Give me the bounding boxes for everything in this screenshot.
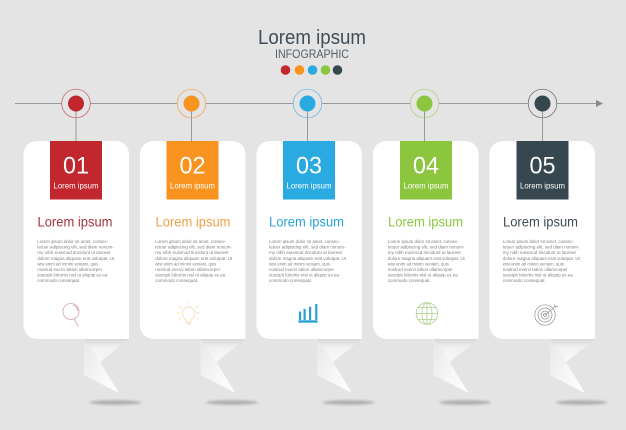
fold 3 [317,339,362,393]
icon: bar chart [298,304,318,323]
body text 4: tetuer adipiscing elit, sed diam nonum- [388,245,465,250]
shadow 5 [556,400,608,405]
body text 1: my nibh euismod tincidunt ut laoreet [37,250,111,255]
body text 2: tetuer adipiscing elit, sed diam nonum- [155,245,232,250]
badge 2 [166,141,218,200]
heading 5: Lorem ipsum [503,214,578,230]
body text 1: dolore magna aliquam erat volutpat. Ut [37,256,115,261]
body text 3: suscipit lobortis nisl ut aliquip ex ea [269,273,339,278]
body text 1: wisi enim ad minim veniam, quis [37,261,99,266]
body text 4: wisi enim ad minim veniam, quis [388,261,449,266]
body text 5: suscipit lobortis nisl ut aliquip ex ea [503,273,573,278]
badge 2: 02 [180,152,206,180]
step 4 [373,89,491,405]
body text 5 [503,239,580,283]
body text 5: commodo consequat. [503,278,546,283]
body text 1: tetuer adipiscing elit, sed diam nonum- [37,245,114,250]
body text 2: commodo consequat. [155,278,198,283]
badge 4 [400,141,452,200]
card 2 [140,141,246,339]
body text 3: dolore magna aliquam erat volutpat. Ut [269,256,347,261]
badge 3 [283,141,335,200]
badge 2: Lorem ipsum [170,182,215,190]
body text 5: Lorem ipsum dolor sit amet, consec- [503,239,574,244]
badge 4: Lorem ipsum [404,182,449,190]
node 4 [410,89,439,118]
body text 2: wisi enim ad minim veniam, quis [155,261,217,266]
body text 4: suscipit lobortis nisl ut aliquip ex ea [388,273,458,278]
body text 4: commodo consequat. [388,278,431,283]
body text 3: tetuer adipiscing elit, sed diam nonum- [269,245,346,250]
body text 4: nostrud exerci tation ullamcorper [388,267,453,272]
connector 3 [307,112,308,142]
body text 5: dolore magna aliquam erat volutpat. Ut [503,256,580,261]
body text 3: wisi enim ad minim veniam, quis [269,261,331,266]
body text 2: Lorem ipsum dolor sit amet, consec- [155,239,227,244]
icon: globe [416,303,438,324]
badge 4: 04 [413,152,439,180]
body text 5: my nibh euismod tincidunt ut laoreet [503,250,576,255]
badge 3: Lorem ipsum [286,182,332,190]
body text 5: nostrud exerci tation ullamcorper [503,267,568,272]
connector 5 [542,112,543,142]
body text 4: my nibh euismod tincidunt ut laoreet [388,250,461,255]
body text 3: my nibh euismod tincidunt ut laoreet [269,250,343,255]
icon: magnifier [63,304,79,326]
shadow 3 [322,400,374,405]
badge 1 [50,141,102,200]
step 2 [140,89,258,405]
body text 1: nostrud exerci tation ullamcorper [37,267,103,272]
badge 3: 03 [296,152,322,180]
timeline arrow [15,100,603,107]
shadow 2 [206,400,258,405]
fold 4 [434,339,478,393]
node 2 [177,89,206,118]
step 1 [24,89,142,405]
connector 4 [424,112,425,142]
heading 3: Lorem ipsum [269,214,344,230]
body text 3 [269,239,347,283]
body text 3: commodo consequat. [269,278,312,283]
title colour dots [281,65,342,75]
badge 5: 05 [530,152,556,180]
body text 2: dolore magna aliquam erat volutpat. Ut [155,256,233,261]
fold 5 [550,339,595,393]
title: INFOGRAPHIC [275,49,349,61]
step 5 [490,89,608,405]
icon: target [535,304,558,325]
badge 1: 01 [63,152,89,180]
shadow 1 [90,400,142,405]
heading 2: Lorem ipsum [156,214,230,230]
body text 2: my nibh euismod tincidunt ut laoreet [155,250,229,255]
badge 5: Lorem ipsum [520,182,565,190]
fold 1 [84,339,129,393]
body text 2 [155,239,233,283]
title [258,27,366,61]
body text 5: wisi enim ad minim veniam, quis [503,261,564,266]
icon: light bulb [176,302,200,324]
node 1 [62,89,90,118]
card 4 [373,141,478,339]
card 1 [24,141,129,339]
body text 5: tetuer adipiscing elit, sed diam nonum- [503,245,580,250]
fold 2 [200,339,246,393]
heading 4: Lorem ipsum [388,214,463,230]
body text 1: suscipit lobortis nisl ut aliquip ex ea [37,273,108,278]
node 5 [528,89,557,118]
body text 4 [388,239,465,283]
body text 3: nostrud exerci tation ullamcorper [269,267,334,272]
step 3 [256,89,374,405]
card 3 [256,141,362,339]
title: Lorem ipsum [258,27,366,49]
node 3 [293,89,322,118]
shadow 4 [439,400,491,405]
connector 2 [191,112,192,142]
badge 5 [516,141,568,200]
body text 1: commodo consequat. [37,278,80,283]
body text 2: nostrud exerci tation ullamcorper [155,267,221,272]
body text 1: Lorem ipsum dolor sit amet, consec- [37,239,109,244]
badge 1: Lorem ipsum [54,182,99,190]
connector 1 [76,112,77,142]
body text 2: suscipit lobortis nisl ut aliquip ex ea [155,273,226,278]
body text 1 [37,239,115,283]
heading 1: Lorem ipsum [38,214,112,230]
body text 4: Lorem ipsum dolor sit amet, consec- [388,239,459,244]
card 5 [490,141,595,339]
body text 3: Lorem ipsum dolor sit amet, consec- [269,239,340,244]
body text 4: dolore magna aliquam erat volutpat. Ut [388,256,465,261]
